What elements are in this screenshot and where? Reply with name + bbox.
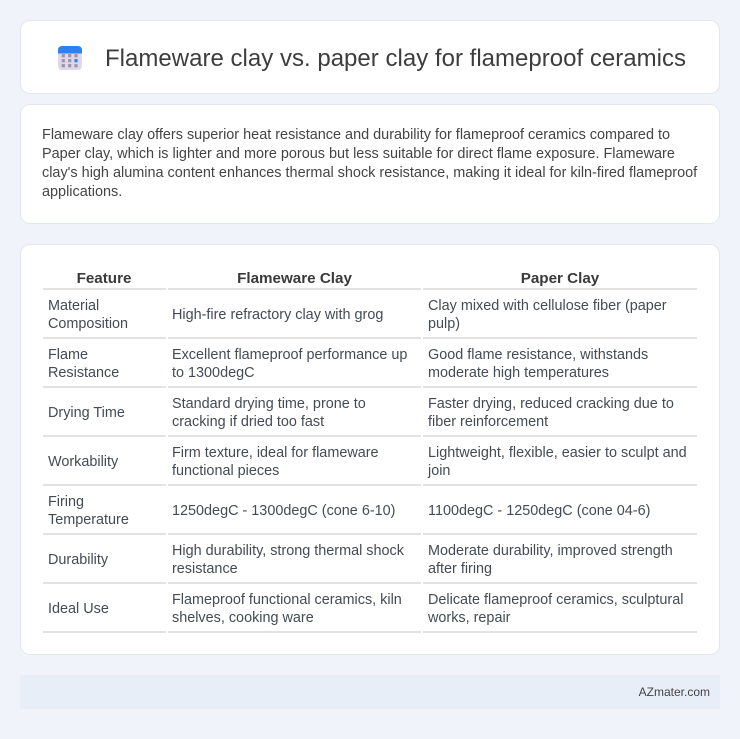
comparison table: 1100degC - 1250degC (cone 04-6)	[428, 503, 650, 519]
heading: Flameware clay vs. paper clay for flameproof ceramics	[105, 45, 686, 72]
comparison table: Firm texture, ideal for flameware	[172, 445, 379, 461]
row: Flame Resistance	[48, 347, 119, 381]
comparison table: Moderate durability, improved strength	[428, 543, 673, 559]
column header: Flameware Clay: Flameware Clay	[237, 270, 352, 287]
column header: Feature: Feature	[77, 270, 131, 287]
comparison table: functional pieces	[172, 463, 279, 479]
panel: summary	[20, 104, 720, 224]
panel: title	[20, 20, 720, 94]
summary text: Paper clay, which is lighter and more porous but less suitable for direct flame exposure. Flameware	[42, 146, 675, 162]
comparison table: Excellent flameproof performance up	[172, 347, 407, 363]
row: Drying Time: Drying Time	[48, 405, 125, 421]
row: Material Composition	[48, 298, 128, 332]
row: Firing Temperature	[48, 494, 129, 528]
comparison table: Faster drying, reduced cracking due to	[428, 396, 674, 412]
comparison table: Flameproof functional ceramics, kiln	[172, 592, 402, 608]
row: Firing Temperature: Firing	[48, 494, 84, 510]
comparison table: after firing	[428, 561, 492, 577]
comparison table: 1250degC - 1300degC (cone 6-10)	[172, 503, 395, 519]
comparison table: to 1300degC	[172, 365, 255, 381]
row: Material Composition: Material	[48, 298, 99, 314]
summary text	[42, 127, 698, 200]
comparison table: Good flame resistance, withstands	[428, 347, 648, 363]
footer credit: AZmater.com	[639, 685, 710, 699]
row: Durability: Durability	[48, 552, 108, 568]
comparison table: moderate high temperatures	[428, 365, 609, 381]
summary text: clay's high alumina content enhances thermal shock resistance, making it ideal for kiln-fired flameproof	[42, 165, 697, 181]
comparison table: cracking if dried too fast	[172, 414, 324, 430]
comparison table: join	[428, 463, 450, 479]
comparison table: High durability, strong thermal shock	[172, 543, 404, 559]
comparison table: Standard drying time, prone to	[172, 396, 366, 412]
row: Workability: Workability	[48, 454, 118, 470]
row: Firing Temperature: Temperature	[48, 512, 129, 528]
row: Ideal Use: Ideal Use	[48, 601, 109, 617]
comparison table: works, repair	[428, 610, 510, 626]
comparison table: Lightweight, flexible, easier to sculpt and	[428, 445, 687, 461]
icon: calendar	[58, 46, 82, 70]
comparison table: Clay mixed with cellulose fiber (paper	[428, 298, 667, 314]
comparison table: shelves, cooking ware	[172, 610, 314, 626]
comparison table: fiber reinforcement	[428, 414, 548, 430]
comparison table: resistance	[172, 561, 238, 577]
comparison table: Delicate flameproof ceramics, sculptural	[428, 592, 683, 608]
summary text: applications.	[42, 184, 122, 200]
footer bar	[20, 675, 720, 709]
comparison table: pulp)	[428, 316, 460, 332]
comparison table: High-fire refractory clay with grog	[172, 307, 383, 323]
panel: comparison table	[20, 244, 720, 655]
summary text: Flameware clay offers superior heat resistance and durability for flameproof ceramics compared to	[42, 127, 670, 143]
column header: Paper Clay: Paper Clay	[521, 270, 599, 287]
row: Material Composition: Composition	[48, 316, 128, 332]
row: Flame Resistance: Flame	[48, 347, 88, 363]
row: Flame Resistance: Resistance	[48, 365, 119, 381]
